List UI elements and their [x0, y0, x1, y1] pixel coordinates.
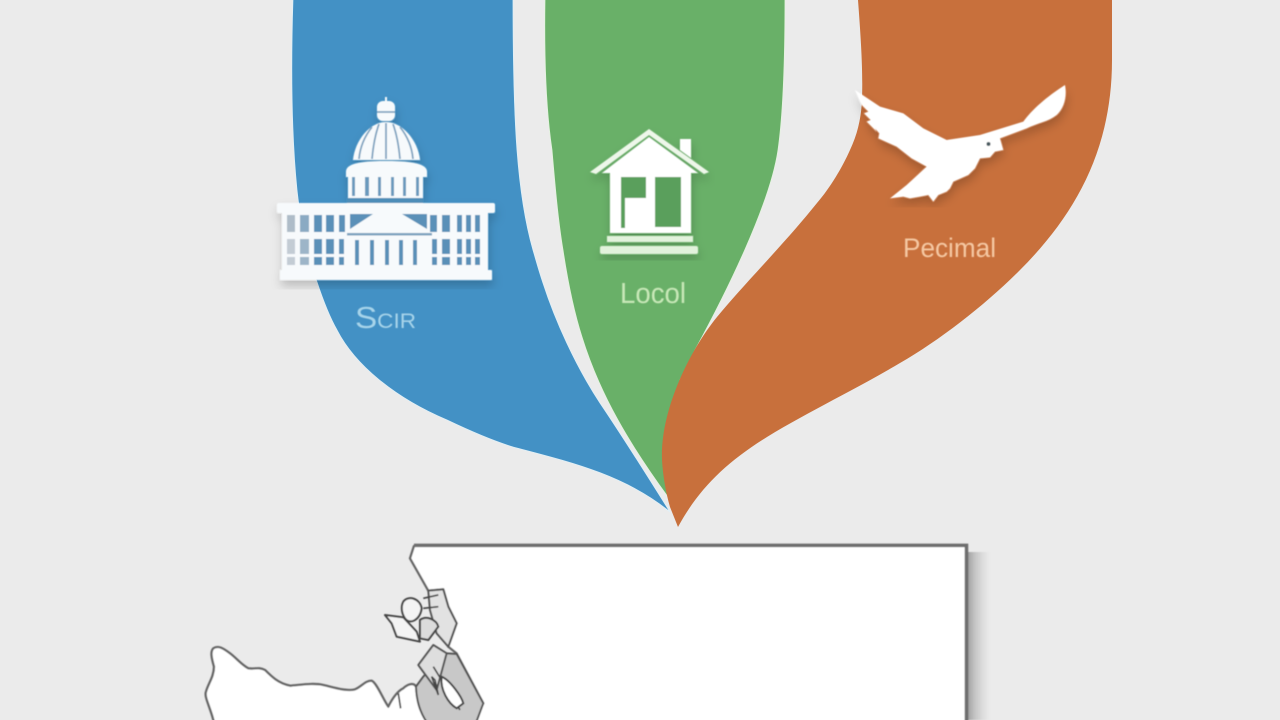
map top and right border	[414, 545, 967, 720]
icon: house	[590, 129, 709, 254]
dome ribs	[359, 112, 413, 159]
panel: local ribbon	[545, 0, 785, 497]
map: state outline	[206, 545, 990, 720]
panel: state ribbon	[292, 0, 670, 512]
upper sound	[428, 589, 457, 647]
islands and inlets	[385, 615, 420, 642]
label: state: SCIR	[355, 300, 416, 335]
central inlet	[418, 645, 447, 690]
label: personal: Pecimal	[903, 233, 996, 263]
puget sound	[416, 653, 483, 720]
label: local: Locol	[620, 278, 686, 310]
panel: personal ribbon	[662, 0, 1112, 527]
drum columns	[352, 177, 419, 196]
windows	[287, 214, 480, 265]
map side shadow	[966, 552, 990, 720]
icon: capitol building	[277, 97, 495, 280]
icon: bird	[855, 85, 1066, 202]
